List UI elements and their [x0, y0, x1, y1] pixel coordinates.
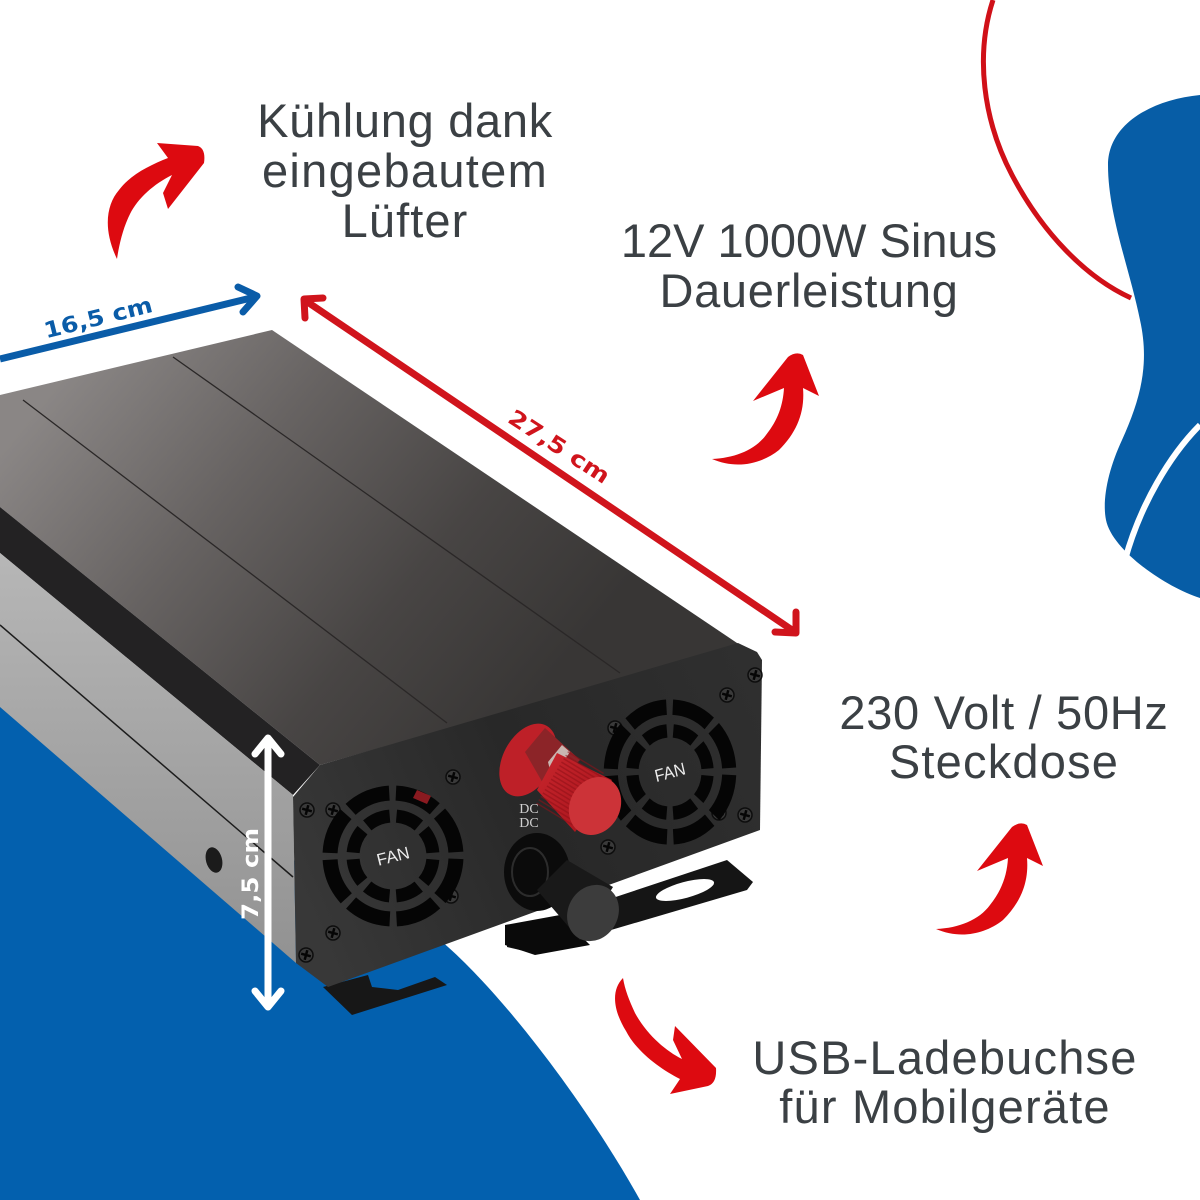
- DC labels: DC: [519, 816, 539, 831]
- top face: [0, 330, 740, 765]
- side panel: [0, 553, 296, 963]
- decorative white curve: [1125, 425, 1200, 560]
- label: USB: für Mobilgeräte: [779, 1080, 1111, 1133]
- fan: right: FAN: [653, 759, 687, 786]
- decorative red circle outline: [983, 0, 1131, 298]
- fan: right: [608, 704, 732, 840]
- mounting bracket: left: [323, 975, 447, 1015]
- arrow: USB: [615, 978, 716, 1094]
- decorative blue shape: bottom left: [0, 700, 640, 1200]
- DC labels: [519, 802, 539, 831]
- label: cooling: Kühlung dank: [257, 94, 553, 147]
- dimension: width 16,5 cm: 16,5 cm: [42, 293, 155, 344]
- DC labels: DC: [519, 802, 539, 817]
- black fuse cap: [504, 833, 629, 955]
- dimension: width 16,5 cm: [0, 287, 257, 359]
- dimension: height 7,5 cm: [239, 738, 281, 1007]
- label: cooling: eingebautem: [262, 144, 548, 197]
- fan: left: [327, 790, 459, 922]
- dimension: height 7,5 cm: 7,5 cm: [239, 828, 264, 920]
- label: cooling: Lüfter: [342, 194, 468, 247]
- label: continuous power: 12V 1000W Sinus: [621, 214, 997, 267]
- dimension: length 27,5 cm: 27,5 cm: [503, 405, 614, 490]
- arrow: continuous power: [712, 353, 819, 465]
- fan: left: FAN: [375, 843, 411, 870]
- red terminal: [488, 714, 631, 844]
- dark side edge: [0, 507, 320, 795]
- mounting bracket: right: [507, 860, 753, 953]
- arrow: socket: [936, 823, 1043, 935]
- arrow: cooling: [108, 143, 204, 259]
- product: power inverter: [0, 330, 762, 1015]
- front panel: [293, 643, 762, 987]
- screws: [299, 668, 762, 962]
- label: continuous power: Dauerleistung: [659, 264, 959, 317]
- label: socket: 230 Volt / 50Hz: [839, 686, 1169, 739]
- decorative blue shape: top right: [1105, 95, 1200, 598]
- label: socket: Steckdose: [889, 735, 1119, 788]
- label: USB: USB-Ladebuchse: [752, 1031, 1138, 1084]
- dimension: length 27,5 cm: [304, 298, 796, 633]
